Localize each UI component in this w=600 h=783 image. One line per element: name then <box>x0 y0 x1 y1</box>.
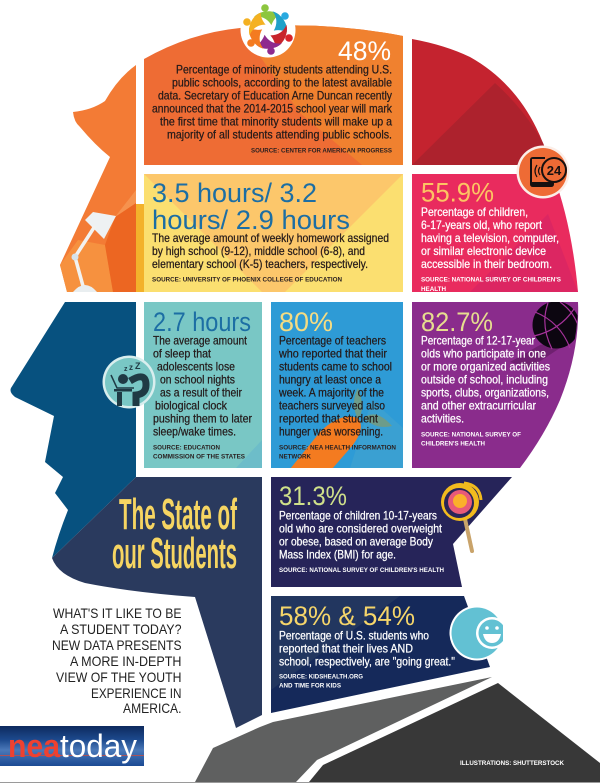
panel: title and chin <box>52 477 262 728</box>
icon: lollipop <box>441 483 481 551</box>
icon: student asleep at desk <box>102 356 156 408</box>
icon: desk lamp <box>72 212 116 292</box>
logo: neatoday: nea <box>8 728 60 764</box>
panel: homework hours: by high school (9-12), middle school (6-8), and <box>152 244 365 258</box>
panel: title and chin: The State of <box>119 490 237 539</box>
panel: 48% minority students: SOURCE: CENTER FOR AMERICAN PROGRESS <box>251 148 393 154</box>
logo: neatoday: today <box>60 728 137 764</box>
panel: 31.3% overweight: 31.3% <box>279 481 347 511</box>
panel: 82.7% activities: olds who participate in one <box>421 346 546 360</box>
panel: 48% minority students: announced that the 2014-2015 school year will mark <box>152 102 393 116</box>
panel: 80% teachers, student hunger: NETWORK <box>279 454 311 460</box>
icon: student asleep at desk: z <box>124 366 128 373</box>
panel: 80% teachers, student hunger: reported that student <box>279 412 379 426</box>
intro text: AMERICA. <box>123 700 182 716</box>
panel: 80% teachers, student hunger: students came to school <box>279 360 392 374</box>
panel: 48% minority students: the first time that minority students will make up a <box>160 114 392 128</box>
panel: 31.3% overweight: or obese, based on average Body <box>279 534 433 548</box>
icon: carrot <box>290 388 392 469</box>
shoulder: dark with credit: ILLUSTRATIONS: SHUTTERSTOCK <box>460 760 564 767</box>
panel: red crown <box>412 39 552 165</box>
panel: 80% teachers, student hunger: Percentage of teachers <box>279 334 386 348</box>
panel: 2.7 hours sleep: of sleep that <box>153 346 212 360</box>
panel: 82.7% activities: and other extracurricular <box>421 398 536 412</box>
panel: 31.3% overweight: old who are considered overweight <box>279 522 443 536</box>
intro text: A STUDENT TODAY? <box>60 621 182 637</box>
panel: 80% teachers, student hunger <box>271 302 403 469</box>
panel: 80% teachers, student hunger: 80% <box>279 307 333 337</box>
panel: 55.9% devices in bedroom: SOURCE: NATIONAL SURVEY OF CHILDREN'S <box>421 276 562 284</box>
intro text: WHAT'S IT LIKE TO BE <box>53 605 182 621</box>
panel: 55.9% devices in bedroom: 6-17-years old, who report <box>421 218 543 232</box>
panel: 82.7% activities: SOURCE: NATIONAL SURVEY OF <box>421 432 521 438</box>
panel: 2.7 hours sleep: SOURCE: EDUCATION <box>153 444 220 452</box>
title <box>112 490 237 578</box>
panel: 80% teachers, student hunger: hungry at least once a <box>279 372 381 386</box>
panel: 2.7 hours sleep <box>144 302 262 468</box>
panel: 2.7 hours sleep: on school nights <box>160 372 235 386</box>
panel: 58% and 54% going great: AND TIME FOR KIDS <box>279 682 342 690</box>
panel: title and chin: our Students <box>112 529 237 578</box>
panel: 48% minority students: Percentage of minority students attending U.S. <box>176 62 392 76</box>
panel: 55.9% devices in bedroom: or similar electronic device <box>421 244 546 258</box>
intro text <box>52 605 182 716</box>
panel: 2.7 hours sleep: as a result of their <box>160 386 242 400</box>
panel: 55.9% devices in bedroom <box>412 174 578 293</box>
panel: 80% teachers, student hunger: hunger was worsening. <box>279 424 383 438</box>
panel: 55.9% devices in bedroom: 55.9% <box>421 178 494 208</box>
panel: 82.7% activities <box>412 302 580 468</box>
icon: student asleep at desk: Z <box>135 361 141 371</box>
intro text: VIEW OF THE YOUTH <box>56 669 182 685</box>
icon: basketball <box>532 302 580 349</box>
icon: phone with 24 <box>516 146 570 198</box>
panel: 2.7 hours sleep: pushing them to later <box>153 412 252 426</box>
panel: 48% minority students: data. Secretary of Education Arne Duncan recently <box>158 88 392 102</box>
intro text: EXPERIENCE IN <box>91 685 182 701</box>
panel: homework hours: hours/ 2.9 hours <box>152 205 350 235</box>
panel: 48% minority students: 48% <box>338 36 391 66</box>
panel: 2.7 hours sleep: 2.7 hours <box>153 307 251 337</box>
panel: 48% minority students: majority of all students attending public schools. <box>167 128 392 142</box>
panel: 80% teachers, student hunger: week. A majority of the <box>278 386 384 400</box>
panel: 31.3% overweight <box>271 477 512 587</box>
panel: 58% and 54% going great <box>271 596 490 713</box>
panel: 55.9% devices in bedroom: Percentage of children, <box>421 205 528 219</box>
panel: 48% minority students: public schools, according to the latest available <box>172 76 392 90</box>
panel: 58% and 54% going great: Percentage of U.S. students who <box>279 628 429 642</box>
panel: 82.7% activities: or more organized activities <box>421 360 550 374</box>
panel: homework hours: The average amount of weekly homework assigned <box>152 231 389 245</box>
face profile: blue <box>10 302 136 558</box>
panel: 31.3% overweight: SOURCE: NATIONAL SURVEY OF CHILDREN'S HEALTH <box>279 567 444 574</box>
logo: neatoday <box>0 726 144 766</box>
panel: 48% minority students <box>144 25 403 165</box>
icon: smiley <box>450 606 503 660</box>
panel: homework hours: 3.5 hours/ 3.2 <box>152 178 317 208</box>
panel: 82.7% activities: activities. <box>421 412 464 426</box>
shoulder: gray <box>195 677 492 782</box>
panel: 2.7 hours sleep: COMMISSION OF THE STATES <box>153 454 246 460</box>
panel: homework hours <box>144 174 403 292</box>
panel: 2.7 hours sleep: sleep/wake times. <box>153 424 236 438</box>
icon: group of people logo <box>240 2 296 58</box>
panel: 82.7% activities: outside of school, including <box>421 372 548 386</box>
panel: 82.7% activities: 82.7% <box>421 307 493 337</box>
back of head: orange with lamp <box>60 65 144 292</box>
panel: 58% and 54% going great: 58% & 54% <box>279 601 415 631</box>
panel: 82.7% activities: Percentage of 12-17-year <box>421 334 535 348</box>
panel: 82.7% activities: CHILDREN'S HEALTH <box>421 440 485 448</box>
panel: 2.7 hours sleep: biological clock <box>155 398 228 412</box>
panel: 2.7 hours sleep: The average amount <box>153 334 248 348</box>
shoulder: dark with credit <box>309 683 600 782</box>
intro text: NEW DATA PRESENTS <box>52 637 182 653</box>
panel: 80% teachers, student hunger: teachers surveyed also <box>279 398 385 412</box>
panel: homework hours: SOURCE: UNIVERSITY OF PHOENIX COLLEGE OF EDUCATION <box>152 276 342 284</box>
panel: 55.9% devices in bedroom: HEALTH <box>421 286 446 293</box>
panel: 58% and 54% going great: reported that their lives AND <box>279 642 413 656</box>
icon: student asleep at desk: z <box>129 363 133 372</box>
panel: 55.9% devices in bedroom: having a television, computer, <box>421 231 559 245</box>
icon: phone with 24: 24 <box>547 163 562 178</box>
panel: 31.3% overweight: Percentage of children 10-17-years <box>279 508 437 522</box>
panel: 55.9% devices in bedroom: accessible in their bedroom. <box>421 257 552 271</box>
panel: 80% teachers, student hunger: SOURCE: NEA HEALTH INFORMATION <box>279 444 396 452</box>
panel: 2.7 hours sleep: adolescents lose <box>157 360 235 374</box>
panel: 82.7% activities: sports, clubs, organizations, <box>421 386 549 400</box>
panel: 58% and 54% going great: school, respectively, are "going great." <box>279 654 455 668</box>
panel: homework hours: elementary school (K-5) teachers, respectively. <box>152 257 368 271</box>
intro text: A MORE IN-DEPTH <box>70 653 182 669</box>
panel: 80% teachers, student hunger: who reported that their <box>278 346 387 360</box>
panel: 31.3% overweight: Mass Index (BMI) for age. <box>279 548 396 562</box>
panel: 58% and 54% going great: SOURCE: KIDSHEALTH.ORG <box>279 674 363 680</box>
